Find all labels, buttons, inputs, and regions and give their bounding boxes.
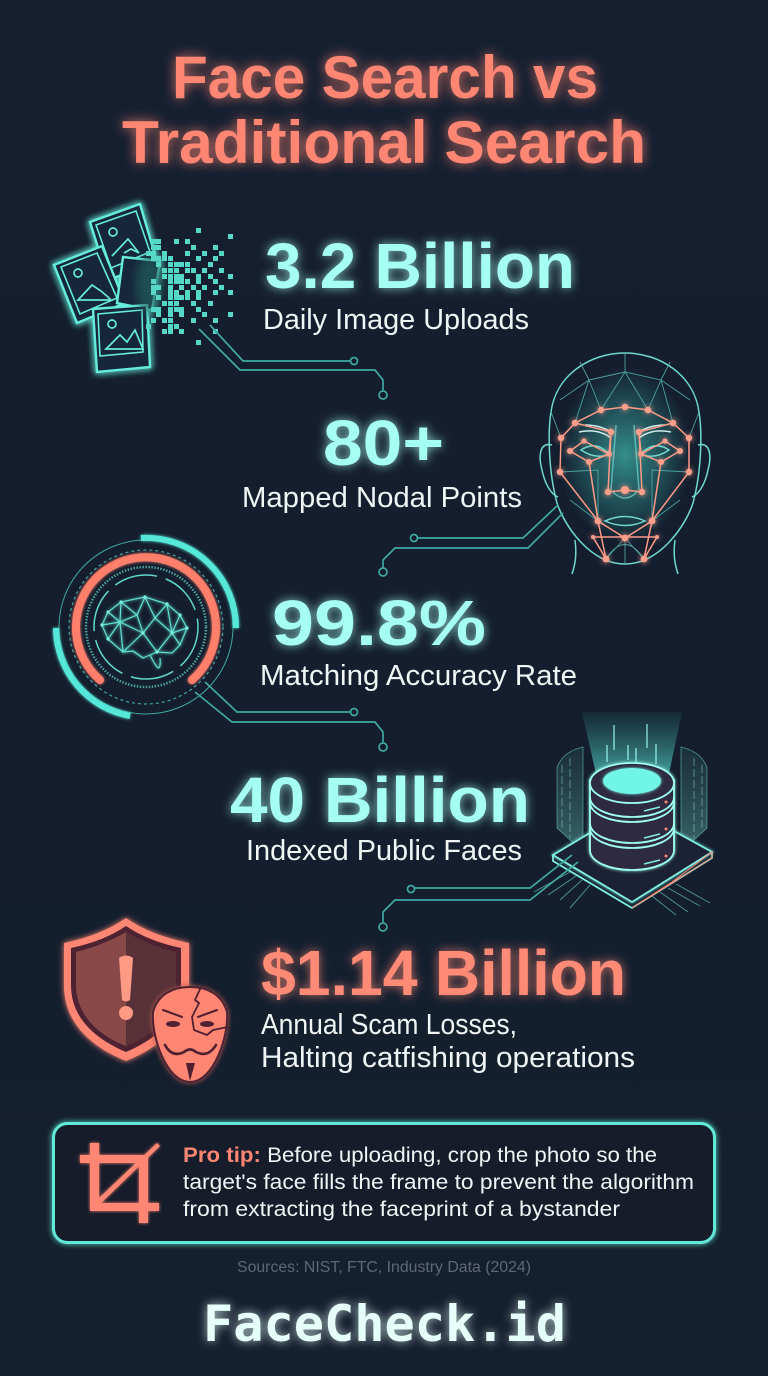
- icon: glowing database on platform: [534, 712, 712, 915]
- title: [122, 44, 646, 176]
- stat: 99.8%: [260, 587, 577, 692]
- connector: photos to nodal points: [199, 325, 387, 399]
- sources: Sources: NIST, FTC, Industry Data (2024): [237, 1259, 531, 1276]
- stat: 40 Billion: Indexed Public Faces: [246, 835, 522, 867]
- stat: 99.8%: 99.8%: [272, 587, 486, 659]
- icon: warning shield and cracked mask: [64, 918, 228, 1082]
- stat: $1.14 Billion: [261, 937, 635, 1074]
- panel: pro tip: [54, 1124, 714, 1242]
- stat: 40 Billion: [230, 764, 530, 867]
- icon: crop tool: [80, 1143, 160, 1223]
- stat: 80+: 80+: [323, 407, 444, 479]
- stat: 3.2 Billion: [263, 230, 575, 336]
- stat: $1.14 Billion: Halting catfishing operations: [261, 1042, 635, 1074]
- stat: 3.2 Billion: Daily Image Uploads: [263, 304, 529, 336]
- icon: face mesh with nodal points: [540, 353, 710, 574]
- connector: database to scam losses: [379, 855, 578, 931]
- stat: 40 Billion: 40 Billion: [230, 764, 530, 836]
- title: Face Search vs: [172, 44, 598, 111]
- stat: 80+: [242, 407, 522, 514]
- stat: 80+: Mapped Nodal Points: [242, 482, 522, 514]
- stat: 99.8%: Matching Accuracy Rate: [260, 660, 577, 692]
- icon: brain in circular HUD: [56, 538, 236, 716]
- icon: scattered photos dissolving into pixels: [54, 204, 233, 372]
- tip text: Pro tip: Before uploading, crop the photo so the: [183, 1143, 657, 1167]
- tip text: from extracting the faceprint of a bystander: [183, 1197, 620, 1221]
- connector: face to accuracy: [379, 505, 563, 576]
- stat: $1.14 Billion: $1.14 Billion: [261, 937, 626, 1009]
- title: Traditional Search: [122, 109, 646, 176]
- tip text: [183, 1143, 694, 1221]
- stat: 3.2 Billion: 3.2 Billion: [265, 230, 575, 302]
- connector: brain to indexed faces: [195, 682, 387, 751]
- stat: $1.14 Billion: Annual Scam Losses,: [261, 1009, 517, 1041]
- tip text: target's face fills the frame to prevent the algorithm: [183, 1170, 694, 1194]
- brand logo: FaceCheck.id: [203, 1295, 566, 1353]
